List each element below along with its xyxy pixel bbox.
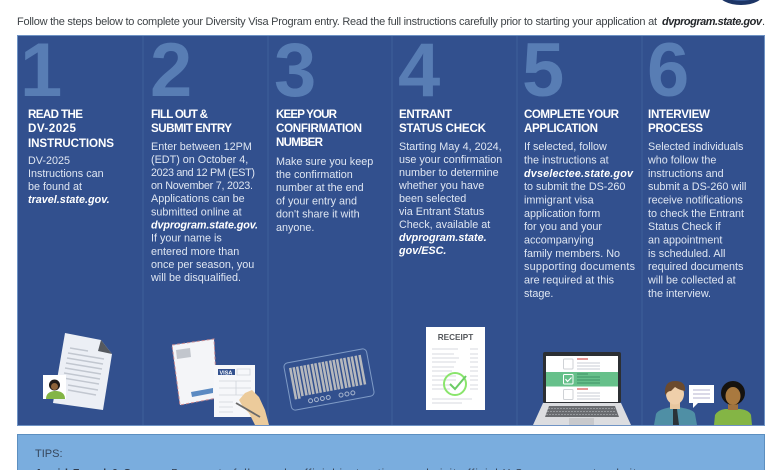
intro text: .: [762, 16, 765, 28]
step 5: application form: [524, 208, 600, 220]
step 4: via Entrant Status: [399, 206, 485, 218]
icon: envelope and visa form: [172, 339, 269, 425]
step 3: don't share it with: [276, 208, 360, 220]
step 5: accompanying: [524, 234, 594, 246]
step 4: Check, available at: [399, 219, 490, 231]
step 3: number at the end: [276, 182, 364, 194]
step 5: to submit the DS-260: [524, 181, 625, 193]
step 6: is scheduled. All: [648, 248, 725, 260]
step 5: family members. No: [524, 248, 620, 260]
step 5: [522, 28, 636, 300]
step 2: entered more than: [151, 246, 239, 258]
step 6: [647, 28, 746, 300]
step 1: 1: [20, 28, 62, 113]
step 4: [398, 28, 502, 257]
icon: barcode card: [283, 348, 375, 411]
step 4: ENTRANT: [399, 108, 452, 121]
step 6: INTERVIEW: [648, 108, 710, 121]
icon: receipt with check: RECEIPT: [438, 333, 473, 342]
step 2: submitted online at: [151, 206, 242, 218]
step 4: 4: [398, 28, 440, 113]
icon: interview people: [654, 381, 752, 425]
step 6: required documents: [648, 261, 744, 273]
step 6: receive notifications: [648, 194, 743, 206]
step 5: are required at this: [524, 274, 615, 286]
step 6: instructions and: [648, 168, 724, 180]
step 2: Enter between 12PM: [151, 141, 252, 153]
step 4: number to determine: [399, 167, 499, 179]
step 5: dvselectee.state.gov: [524, 168, 634, 180]
step 5: COMPLETE YOUR: [524, 108, 620, 121]
step 4: use your confirmation: [399, 154, 502, 166]
step 4: been selected: [399, 193, 466, 205]
icon: laptop with checklist: [533, 352, 631, 425]
step 4: dvprogram.state.: [399, 232, 487, 244]
panel: steps background: [18, 36, 764, 426]
step 3: NUMBER: [276, 136, 324, 149]
step 6: who follow the: [647, 154, 716, 166]
step 5: for you and your: [524, 221, 602, 233]
step 5: APPLICATION: [524, 122, 598, 135]
step 2: (EDT) on October 4,: [151, 154, 248, 166]
step 6: an appointment: [648, 234, 722, 246]
step 6: to check the Entrant: [648, 208, 744, 220]
step 6: Selected individuals: [648, 141, 744, 153]
step 2: SUBMIT ENTRY: [151, 122, 232, 135]
step 1: READ THE: [28, 108, 83, 121]
step 2: [150, 28, 258, 284]
step 5: stage.: [524, 288, 553, 300]
intro text: dvprogram.state.gov: [662, 16, 763, 28]
step 5: supporting documents: [524, 261, 636, 273]
step 3: 3: [274, 28, 316, 113]
step 2: on November 7, 2023.: [151, 180, 253, 192]
step 4: whether you have: [398, 180, 484, 192]
step 3: anyone.: [276, 222, 314, 234]
tips heading: TIPS:: [35, 448, 63, 460]
step 1: Instructions can: [28, 168, 104, 180]
step 5: the instructions at: [524, 154, 609, 166]
step 6: the interview.: [648, 288, 711, 300]
panel: tips: [18, 434, 764, 470]
step 2: will be disqualified.: [150, 272, 241, 284]
icon: document and photo: [43, 333, 112, 410]
intro text: Follow the steps below to complete your Diversity Visa Program entry. Read the full instructions carefully prior to starting your application at: [17, 16, 657, 28]
seal: [718, 0, 764, 5]
step 2: Applications can be: [151, 193, 245, 205]
step 1: DV-2025: [28, 122, 77, 135]
step 5: If selected, follow: [524, 141, 607, 153]
step 5: 5: [522, 28, 564, 113]
step 3: [274, 28, 373, 234]
step 1: DV-2025: [28, 155, 70, 167]
step 3: the confirmation: [276, 169, 353, 181]
step 6: PROCESS: [648, 122, 703, 135]
step 6: Status Check if: [648, 221, 722, 233]
step 2: once per season, you: [151, 259, 254, 271]
step 1: travel.state.gov.: [28, 194, 110, 206]
step 6: submit a DS-260 will: [648, 181, 746, 193]
step 3: of your entry and: [276, 196, 357, 208]
step 3: KEEP YOUR: [276, 108, 338, 121]
step 1: INSTRUCTIONS: [28, 137, 114, 150]
step 2: 2023 and 12 PM (EST): [151, 167, 255, 179]
step 3: Make sure you keep: [276, 156, 373, 168]
step 2: 2: [150, 28, 192, 113]
step 3: CONFIRMATION: [276, 122, 362, 135]
step 2: dvprogram.state.gov.: [151, 220, 258, 232]
step 6: 6: [647, 28, 689, 113]
step 5: immigrant visa: [524, 194, 594, 206]
step 1: be found at: [28, 181, 82, 193]
step 2: FILL OUT &: [151, 108, 209, 121]
icon: envelope and visa form: VISA: [220, 370, 232, 376]
step 2: If your name is: [151, 232, 222, 244]
icon: receipt with check: [426, 327, 485, 410]
step 4: gov/ESC.: [398, 245, 446, 257]
step 6: will be collected at: [647, 274, 736, 286]
step 4: Starting May 4, 2024,: [399, 141, 502, 153]
step 4: STATUS CHECK: [399, 122, 487, 135]
step 1: [20, 28, 114, 206]
